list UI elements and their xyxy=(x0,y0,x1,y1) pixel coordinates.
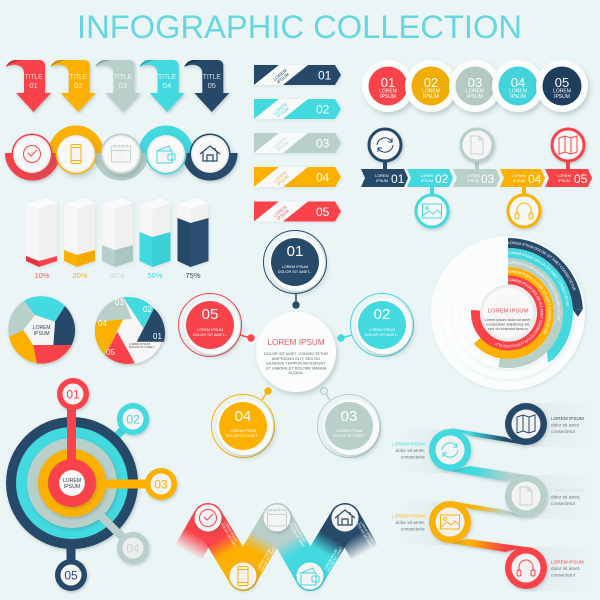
arrow 05: TITLE xyxy=(203,72,221,81)
timeline stems xyxy=(385,160,568,196)
ribbon 01: IPSUM xyxy=(276,72,290,85)
bar 50% xyxy=(140,198,170,267)
arc red xyxy=(475,280,541,346)
arrow 03: TITLE xyxy=(114,72,132,81)
arrow 01: 01 xyxy=(29,81,38,90)
arrow 02: TITLE xyxy=(69,72,87,81)
item 03: DOLOR SIT AMET xyxy=(333,434,366,438)
item 04: LOREM IPSUM xyxy=(230,429,256,433)
snake caption 4 xyxy=(392,514,425,532)
node 03 xyxy=(145,468,177,500)
snake caption 3: LOREM IPSUM xyxy=(551,488,584,493)
snake caption 5: dolor sit amet, xyxy=(551,566,580,571)
timeline segment 01: 01 xyxy=(391,172,405,186)
pie chart pinwheel xyxy=(8,296,75,364)
item 03: LOREM IPSUM xyxy=(336,429,362,433)
ribbon 04: IPSUM xyxy=(276,174,290,187)
3d bar chart xyxy=(26,198,208,280)
center circle xyxy=(256,312,336,392)
ribbon 04: LOREM xyxy=(272,170,288,184)
zigzag icon calendar xyxy=(264,504,290,532)
rainbow center: Lorem ipsum dolor sit amet, xyxy=(485,318,531,322)
pie chart aperture xyxy=(95,296,165,364)
snake caption 1 xyxy=(551,416,584,434)
arrow 02: 02 xyxy=(74,81,82,90)
snake caption 3 xyxy=(551,488,584,506)
faint shadow bands xyxy=(395,403,595,591)
item 03: 03 xyxy=(341,408,357,425)
circle 05: 05 xyxy=(555,75,569,90)
zigzag icon clock xyxy=(194,504,222,532)
ribbon 03: 03 xyxy=(316,136,330,150)
ring cyan xyxy=(16,427,128,539)
hub center: IPSUM xyxy=(64,484,80,490)
title: INFOGRAPHIC COLLECTION xyxy=(77,9,522,45)
ribbon 04: 04 xyxy=(316,170,330,184)
circle 04 xyxy=(492,60,544,112)
pie chart aperture: 05 xyxy=(106,348,115,357)
center circle: ALIQUA. xyxy=(288,370,304,375)
snake caption 5: consectetur xyxy=(551,572,576,578)
ring red xyxy=(48,459,96,507)
timeline xyxy=(361,129,592,227)
snake caption 2: LOREM IPSUM xyxy=(392,442,425,446)
circle 03: LOREM xyxy=(466,88,484,94)
icon chain xyxy=(10,130,233,176)
zigzag path xyxy=(188,518,365,576)
snake node headphones xyxy=(505,547,547,589)
arrow 04: TITLE xyxy=(158,72,176,81)
arrow 05 xyxy=(184,60,229,112)
pie chart aperture: LOREM IPSUM xyxy=(129,342,151,346)
ribbon 05 xyxy=(254,202,341,222)
arc labels: LOREM IPSUM DOLOR SIT AMET CONSECTETUR xyxy=(508,242,576,291)
zigzag captions: DOLOR SIT AMET xyxy=(327,546,344,572)
node 04: 04 xyxy=(126,542,140,556)
arc labels: LOREM IPSUM DOLOR SIT AMET CONSECTETUR xyxy=(508,261,560,320)
icon calendar xyxy=(100,134,142,174)
ribbon 05: 05 xyxy=(316,205,330,219)
circle 05: LOREM xyxy=(553,88,571,94)
zigzag captions: LOREM IPSUM xyxy=(291,520,306,542)
arrow 05: 05 xyxy=(208,81,216,90)
snake caption 4: dolor sit amet, xyxy=(396,520,425,525)
zigzag captions: DOLOR SIT AMET xyxy=(220,522,237,548)
arrow 02 xyxy=(51,60,96,112)
item 05: 05 xyxy=(202,306,218,323)
ribbon 01: 01 xyxy=(318,68,332,82)
pie chart pinwheel: LOREM xyxy=(33,325,51,331)
timeline segment 05 xyxy=(545,169,592,187)
snake node document xyxy=(505,475,547,517)
ribbon 02: IPSUM xyxy=(276,106,290,119)
node 05: 05 xyxy=(64,568,78,582)
item 05: DOLOR SIT AMET... xyxy=(193,333,227,337)
ribbon 01: LOREM xyxy=(272,68,288,82)
item 01 xyxy=(264,230,326,294)
timeline segment 03: 03 xyxy=(481,172,495,186)
zigzag captions xyxy=(220,520,376,572)
spoke 04 inner xyxy=(100,515,133,548)
arc labels: LOREM IPSUM DOLOR SIT AMET CONSECTETUR ADIPISCING ELIT xyxy=(494,278,544,348)
timeline segment 02 xyxy=(407,169,453,187)
arc labels: LOREM IPSUM DOLOR SIT AMET CONSECTETUR xyxy=(508,270,552,334)
timeline segment 03 xyxy=(453,169,500,187)
zigzag captions: DOLOR SIT AMET xyxy=(288,522,305,548)
center circle: LOREM IPSUM xyxy=(267,338,325,347)
arrow 01: TITLE xyxy=(24,72,42,81)
snake caption 2: consectetur xyxy=(401,454,425,460)
icon phone xyxy=(56,134,96,174)
spoke 02 xyxy=(72,419,133,483)
timeline segment 03: IPSUM xyxy=(467,179,479,183)
circle 02 xyxy=(405,60,457,112)
timeline segment 04: LOREM xyxy=(512,174,526,178)
circle 05 xyxy=(536,60,588,112)
hub center: LOREM xyxy=(63,478,81,484)
circle 05: IPSUM xyxy=(554,94,570,100)
zigzag captions: LOREM IPSUM xyxy=(256,549,271,570)
circle 02: 02 xyxy=(424,75,438,90)
rainbow center: consectetur adipiscing elit, xyxy=(486,322,530,326)
circle 04: LOREM xyxy=(509,88,527,94)
spoke 05 xyxy=(66,545,76,565)
icon clock xyxy=(12,134,52,174)
rainbow center: LOREM IPSUM xyxy=(488,308,528,314)
item 04 xyxy=(212,394,274,458)
circle 03: 03 xyxy=(468,75,482,90)
circle 01: IPSUM xyxy=(380,94,396,100)
item 02 xyxy=(350,294,414,356)
snake caption 2 xyxy=(392,442,425,460)
zigzag icon wallet xyxy=(296,562,324,590)
ribbon 03: IPSUM xyxy=(276,140,290,153)
snake node sync xyxy=(429,429,471,471)
node 01: 01 xyxy=(66,388,80,402)
connector dots xyxy=(240,294,352,400)
item 02: DOLOR SIT AMET... xyxy=(365,333,399,337)
circle 01 xyxy=(362,60,414,112)
ribbon 02 xyxy=(254,99,341,119)
center circle: ADIPISCING ELIT, SED DO xyxy=(272,356,320,361)
arrow 03 xyxy=(95,60,140,112)
bar 10% xyxy=(26,198,57,267)
spoke 01 xyxy=(67,405,76,465)
timeline segment 05: 05 xyxy=(574,172,588,186)
bar labels: 50% xyxy=(147,271,163,280)
bar 30% xyxy=(102,198,133,267)
timeline segment 01: LOREM xyxy=(375,174,389,178)
snake connectors xyxy=(450,428,526,552)
item 05 xyxy=(178,294,242,356)
snake caption 5 xyxy=(551,560,584,578)
item 04: 04 xyxy=(235,408,251,425)
ribbon list xyxy=(254,65,341,222)
arrow 03: 03 xyxy=(119,81,127,90)
item 01: LOREM IPSUM xyxy=(282,265,308,269)
pie chart aperture: 01 xyxy=(153,332,162,341)
ribbon 03: LOREM xyxy=(272,136,288,150)
node 02 xyxy=(117,403,149,435)
timeline segment 01 xyxy=(361,169,408,187)
hub center xyxy=(59,470,85,496)
zigzag captions: LOREM IPSUM xyxy=(359,520,374,542)
timeline segment 05: IPSUM xyxy=(558,179,570,183)
snake node map xyxy=(505,403,547,445)
white rings xyxy=(431,236,585,390)
timeline segment 02: 02 xyxy=(435,172,449,186)
node 02: 02 xyxy=(126,412,140,426)
bar labels: 20% xyxy=(72,271,88,280)
circle 04: 04 xyxy=(511,75,525,90)
snake caption 1: consectetur xyxy=(551,429,576,434)
central radial diagram xyxy=(178,230,414,458)
center circle: DOLOR SIT AMET, CONSECTETUR xyxy=(264,351,328,356)
ring gray xyxy=(27,438,117,528)
icon wallet xyxy=(146,134,186,174)
ribbon 03 xyxy=(254,133,341,153)
circle 01: 01 xyxy=(381,75,395,90)
timeline icon sync xyxy=(369,129,401,161)
node 04 xyxy=(117,532,149,564)
pie chart aperture: DOLOR SIT AMET xyxy=(129,345,154,349)
pie chart aperture: 03 xyxy=(115,298,124,307)
item 01: 01 xyxy=(287,243,303,260)
zigzag band xyxy=(188,504,376,590)
node 03: 03 xyxy=(154,478,168,492)
circle 03: IPSUM xyxy=(467,94,483,100)
item 01: DOLOR SIT AMET... xyxy=(278,270,312,274)
timeline icon map xyxy=(552,129,584,161)
center circle: EIUSMOD TEMPOR INCIDIDUNT xyxy=(266,360,326,366)
node 05 xyxy=(55,559,87,591)
arc gray xyxy=(499,262,559,363)
timeline segment 02: IPSUM xyxy=(421,179,433,183)
bar labels: 75% xyxy=(185,271,201,280)
circle 01: LOREM xyxy=(379,88,397,94)
timeline segment 02: LOREM xyxy=(420,174,434,178)
ribbon 05: IPSUM xyxy=(276,208,290,221)
zigzag captions: LOREM IPSUM xyxy=(223,520,238,542)
snake caption 2: dolor sit amet, xyxy=(396,448,425,453)
arc labels: LOREM IPSUM DOLOR SIT AMET CONSECTETUR xyxy=(508,252,569,306)
arrow 04: 04 xyxy=(163,81,171,90)
arrow set xyxy=(6,60,229,112)
numbered circles row xyxy=(362,60,588,112)
item 05: LOREM IPSUM xyxy=(197,328,223,332)
bar labels: 30% xyxy=(109,271,125,280)
circle 02: LOREM xyxy=(422,88,440,94)
concentric hub diagram xyxy=(6,378,177,591)
spoke 04 xyxy=(72,483,133,548)
circle 03 xyxy=(449,60,501,112)
ribbon 05: LOREM xyxy=(272,204,288,218)
icon house xyxy=(190,134,230,174)
ring navy xyxy=(6,417,138,549)
zigzag captions: DOLOR SIT AMET xyxy=(356,522,373,548)
ribbon 04 xyxy=(254,167,341,187)
chain arcs xyxy=(10,130,233,176)
timeline icon image xyxy=(416,195,448,227)
timeline segment 04: 04 xyxy=(528,172,542,186)
timeline icon document xyxy=(461,129,493,161)
zigzag captions: DOLOR SIT AMET xyxy=(260,546,277,572)
bar 75% xyxy=(178,198,208,267)
snake caption 3: consectetur xyxy=(551,501,576,506)
center circle: UT LABORE ET DOLORE MAGNA xyxy=(266,366,327,370)
ring yellow xyxy=(38,449,106,517)
timeline icon headphones xyxy=(508,195,540,227)
snake caption 5: LOREM IPSUM xyxy=(551,560,584,564)
arrow 04 xyxy=(140,60,185,112)
ribbon 02: 02 xyxy=(316,102,330,116)
spoke 03 xyxy=(100,480,150,488)
item 04: DOLOR SIT AMET... xyxy=(226,434,260,438)
rainbow center: sed do eiusmod tempor xyxy=(488,327,529,331)
item 02: LOREM IPSUM xyxy=(369,328,395,332)
zigzag captions: LOREM IPSUM xyxy=(323,549,338,570)
bar 20% xyxy=(64,198,95,267)
snake caption 4: LOREM IPSUM xyxy=(392,514,425,518)
ribbon 02: LOREM xyxy=(272,102,288,116)
zigzag icon phone xyxy=(230,562,256,590)
arc labels xyxy=(494,242,576,348)
timeline segment 05: LOREM xyxy=(557,174,571,178)
arc cyan xyxy=(508,253,568,362)
pie chart aperture: 02 xyxy=(143,305,152,314)
zigzag icon house xyxy=(332,504,358,532)
timeline segment 01: IPSUM xyxy=(376,179,388,183)
timeline segment 04 xyxy=(500,169,545,187)
ribbon 01 xyxy=(254,65,341,85)
timeline segment 04: IPSUM xyxy=(513,179,525,183)
rainbow radial chart xyxy=(431,236,587,392)
arc yellow xyxy=(477,272,550,354)
node 01 xyxy=(57,378,89,410)
snake caption 1: dolor sit amet xyxy=(551,422,580,428)
circle 04: IPSUM xyxy=(510,94,526,100)
snake node image xyxy=(429,501,471,543)
circle 02: IPSUM xyxy=(423,94,439,100)
item 03 xyxy=(318,394,380,458)
arrow 01 xyxy=(6,60,51,112)
snake caption 3: dolor sit amet, xyxy=(551,494,580,500)
snake caption 1: LOREM IPSUM xyxy=(551,416,584,421)
bar labels: 10% xyxy=(34,271,50,280)
rainbow center xyxy=(480,285,536,341)
snake timeline xyxy=(392,403,595,591)
pie chart pinwheel: IPSUM xyxy=(34,331,50,337)
arc navy xyxy=(508,243,583,317)
timeline segment 03: LOREM xyxy=(466,174,480,178)
bar labels xyxy=(34,271,201,280)
item 02: 02 xyxy=(374,306,390,323)
snake caption 4: consectetur xyxy=(401,526,425,532)
pie chart aperture: 04 xyxy=(98,319,107,328)
